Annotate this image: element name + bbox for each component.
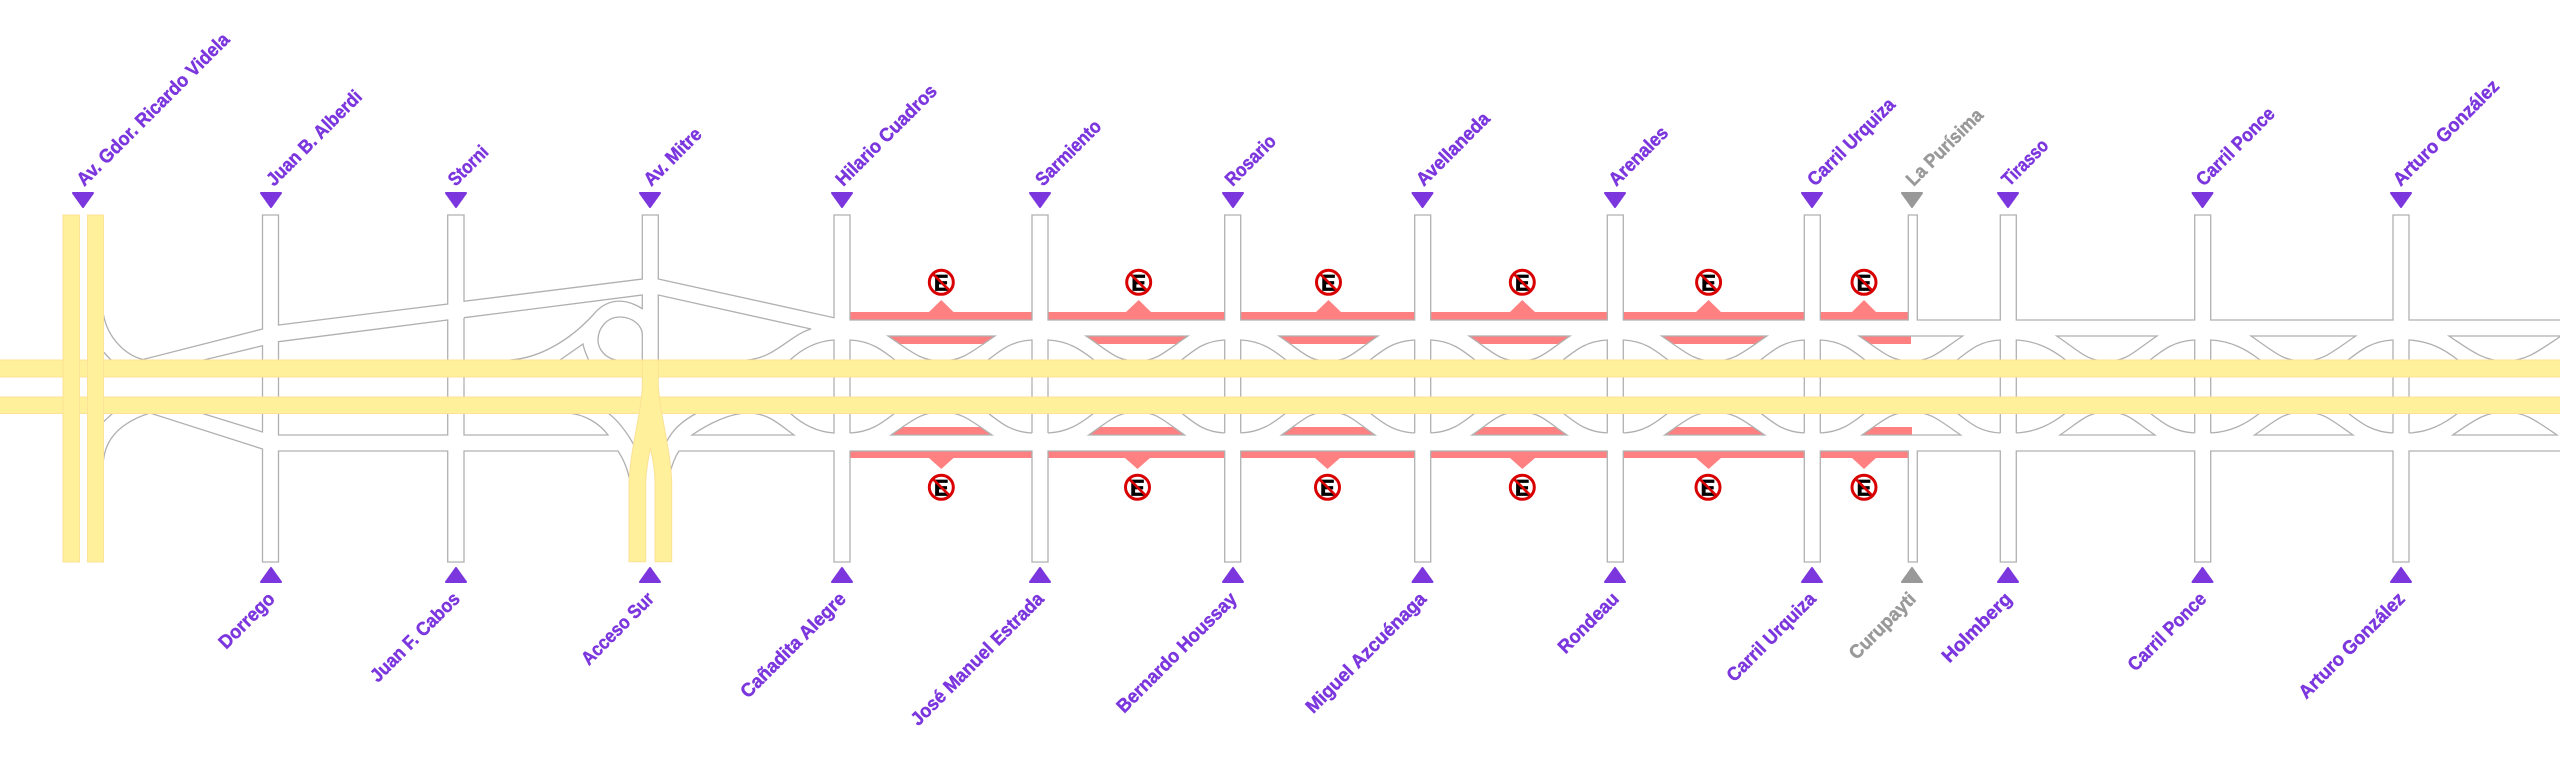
icon: no parking 2 bottom: [1126, 475, 1150, 500]
icon: no parking 3 top: E: [1321, 270, 1336, 295]
block: Tirasso to Carril Ponce: [2016, 336, 2195, 435]
icon: no parking 1 top: [929, 270, 953, 295]
label: Rosario: Rosario: [1221, 131, 1281, 191]
label: Juan F. Cabos: Juan F. Cabos: [367, 589, 465, 687]
icon: no parking 5 bottom: [1696, 475, 1720, 500]
label: Rondeau: Rondeau: [1554, 589, 1624, 658]
red band: Rosario to Avellaneda: [1241, 300, 1415, 469]
icon: no parking 4 bottom: [1510, 475, 1534, 500]
icon: no parking 2 top: E: [1131, 270, 1146, 295]
label: José Manuel Estrada: José Manuel Estrada: [907, 588, 1049, 730]
label: Arturo González: Arturo González: [2389, 76, 2504, 191]
highlighted avenue: Acceso Sur fork: [629, 360, 672, 562]
icon: no parking 1 top: E: [934, 270, 949, 295]
label: Dorrego: Dorrego: [215, 589, 280, 653]
highlighted avenue: Av. Gdor. Ricardo Videla: [63, 215, 104, 562]
icon: no parking 6 bottom: [1852, 475, 1876, 500]
block: Carril Ponce to Arturo González: [2211, 336, 2393, 435]
red band: Avellaneda to Arenales: [1431, 300, 1607, 469]
label: La Purísima: La Purísima: [1902, 105, 1988, 191]
icon: no parking 1 bottom: [929, 475, 953, 500]
icon: no parking 3 top: [1316, 270, 1340, 295]
red band: Arenales to Carril Urquiza: [1623, 300, 1804, 469]
block: Arenales to Carril Urquiza: [1623, 336, 1804, 435]
block: east of Arturo González: [2409, 336, 2560, 435]
label: Storni: Storni: [444, 142, 493, 191]
icon: no parking 3 bottom: E: [1320, 475, 1335, 500]
north street labels: [73, 29, 2504, 207]
icon: no parking 5 bottom: E: [1701, 475, 1715, 500]
block: Sarmiento to Rosario: [1048, 336, 1225, 435]
label: Curupayti: Curupayti: [1845, 589, 1921, 664]
highlighted avenue: main east-west carriageways: [0, 360, 2560, 414]
icon: no parking 1 bottom: E: [934, 475, 949, 500]
icon: no parking 4 bottom: E: [1515, 475, 1530, 500]
icon: no parking 2 top: [1127, 270, 1151, 295]
label: Avellaneda: Avellaneda: [1412, 108, 1495, 191]
icon: no parking 6 bottom: E: [1857, 475, 1871, 500]
label: Holmberg: Holmberg: [1938, 589, 2017, 667]
icon: no parking 5 top: E: [1701, 270, 1716, 295]
no-parking red kerb bands: [850, 300, 1912, 469]
label: Juan B. Alberdi: Juan B. Alberdi: [263, 87, 367, 191]
label: Acceso Sur: Acceso Sur: [578, 588, 659, 670]
label: Arenales: Arenales: [1605, 123, 1673, 191]
label: Miguel Azcuénaga: Miguel Azcuénaga: [1302, 588, 1431, 718]
icon: no parking 5 top: [1697, 270, 1721, 295]
Av. Mitre interchange and loop: [464, 295, 2560, 562]
label: Sarmiento: Sarmiento: [1032, 116, 1106, 191]
icon: no parking 3 bottom: [1316, 475, 1340, 500]
label: Hilario Cuadros: Hilario Cuadros: [832, 81, 942, 191]
label: Av. Mitre: Av. Mitre: [640, 124, 706, 191]
label: Bernardo Houssay: Bernardo Houssay: [1113, 588, 1242, 717]
label: Tirasso: Tirasso: [1998, 135, 2053, 191]
icon: no parking 2 bottom: E: [1130, 475, 1145, 500]
label: Carril Ponce: Carril Ponce: [2192, 104, 2279, 191]
icon: no parking 4 top: [1510, 270, 1534, 295]
red band: Hilario Cuadros to Sarmiento: [850, 300, 1032, 469]
label: Av. Gdor. Ricardo Videla: Av. Gdor. Ricardo Videla: [73, 29, 234, 191]
label: Storni: [444, 142, 493, 207]
red band: Sarmiento to Rosario: [1048, 300, 1225, 469]
block: Carril Urquiza to Tirasso: [1820, 336, 2000, 435]
streets west of Av. Mitre: [104, 215, 2560, 562]
block: Hilario Cuadros to Sarmiento: [850, 336, 1032, 435]
no-parking signs: [929, 270, 1876, 500]
label: Arturo González south: Arturo González: [2295, 589, 2410, 703]
label: Carril Urquiza: Carril Urquiza: [1804, 94, 1900, 191]
label: Carril Urquiza south: Carril Urquiza: [1723, 588, 1821, 686]
label: Rosario: [1221, 131, 1281, 207]
block: Rosario to Avellaneda: [1241, 336, 1415, 435]
label: Tirasso: [1998, 135, 2053, 207]
icon: no parking 4 top: E: [1515, 270, 1530, 295]
red band: Carril Urquiza to La Purísima: [1820, 300, 1912, 469]
label: Cañadita Alegre: Cañadita Alegre: [737, 589, 851, 703]
block: Avellaneda to Arenales: [1431, 336, 1607, 435]
icon: no parking 6 top: [1852, 270, 1876, 295]
icon: no parking 6 top: E: [1857, 270, 1871, 295]
street network outlines: [104, 215, 2560, 562]
south street labels: [215, 568, 2411, 730]
label: Carril Ponce south: Carril Ponce: [2124, 589, 2211, 676]
